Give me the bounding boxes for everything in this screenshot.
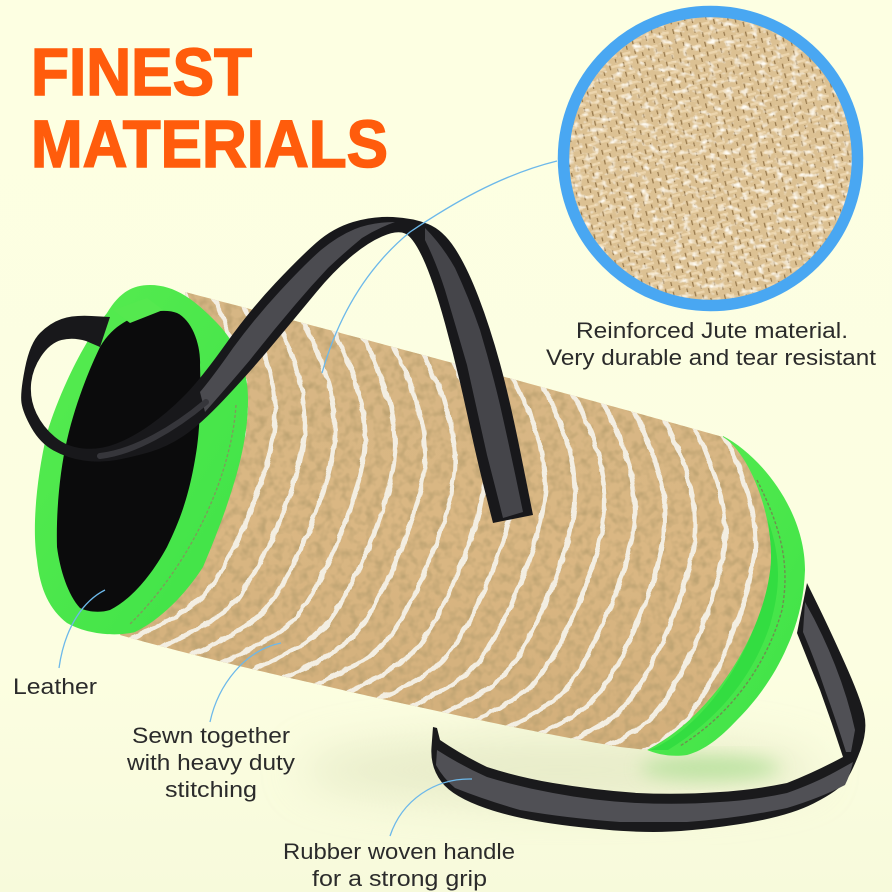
text: handle: for a strong grip bbox=[312, 866, 487, 891]
title: MATERIALS bbox=[31, 107, 388, 182]
text: jute material: Very durable and tear resistant bbox=[546, 345, 877, 370]
text: stitching: with heavy duty bbox=[126, 750, 296, 775]
text: handle bbox=[283, 839, 515, 891]
cylinder body: jute with white stripes bbox=[120, 292, 772, 750]
ground shadow bbox=[300, 736, 820, 804]
text: leather: Leather bbox=[13, 674, 98, 699]
text: stitching bbox=[126, 723, 296, 802]
end band: left green rim bbox=[35, 285, 248, 634]
callout line: handle bbox=[390, 779, 472, 836]
text: stitching: stitching bbox=[165, 777, 257, 802]
callout line: leather bbox=[59, 590, 105, 668]
title bbox=[31, 35, 388, 182]
top handle strap bbox=[21, 217, 533, 523]
panel: jute close-up circle bbox=[558, 6, 863, 311]
callout line: jute bbox=[322, 161, 557, 373]
end band: right green rim bbox=[645, 436, 805, 756]
rim stitching bbox=[130, 405, 236, 624]
text: handle: Rubber woven handle bbox=[283, 839, 515, 864]
text: jute material bbox=[546, 318, 877, 370]
leather inner lining bbox=[57, 311, 200, 612]
callout line: stitching bbox=[210, 643, 281, 722]
text: jute material: Reinforced Jute material. bbox=[576, 318, 848, 343]
text: stitching: Sewn together bbox=[132, 723, 291, 748]
title: FINEST bbox=[31, 35, 252, 110]
lower handle strap bbox=[431, 583, 865, 832]
green hanging tab bbox=[113, 298, 163, 323]
